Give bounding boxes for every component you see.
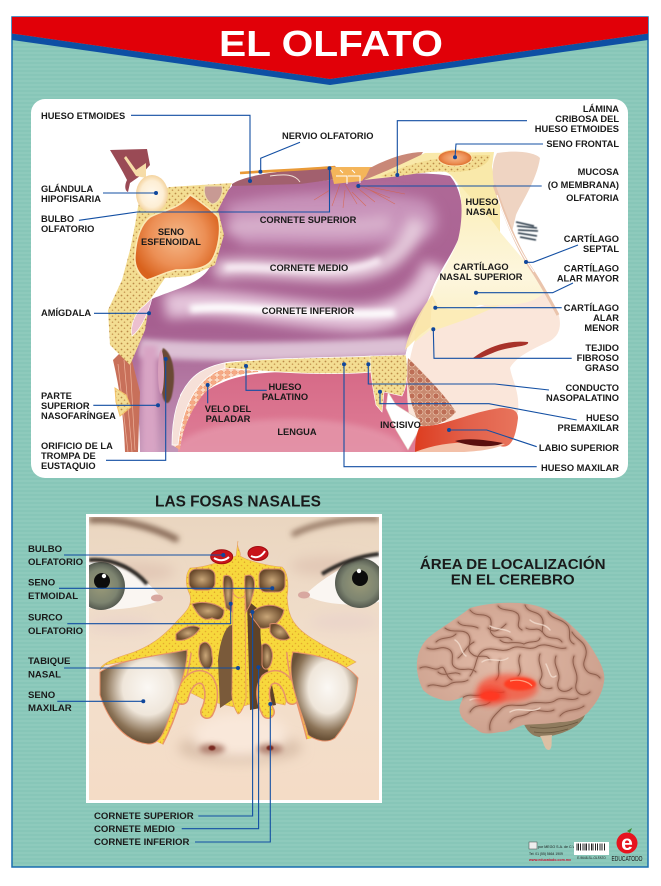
lower nose skin bbox=[407, 285, 560, 425]
label: cartílago alar menor bbox=[433, 303, 619, 333]
label: nervio olfatorio bbox=[258, 131, 373, 174]
label: seno etmoidal: ETMOIDAL bbox=[28, 591, 78, 602]
label: hueso palatino: HUESO bbox=[268, 382, 302, 392]
label: hueso maxilar bbox=[342, 362, 619, 473]
label: seno maxilar: SENO bbox=[28, 690, 56, 701]
pituitary gland bbox=[136, 175, 168, 213]
label: cartílago alar mayor: CARTÍLAGO bbox=[564, 264, 619, 274]
label: cartílago nasal superior: CARTÍLAGO bbox=[453, 262, 509, 272]
brain folds bbox=[420, 605, 600, 730]
label: tejido fibroso graso: TEJIDO bbox=[585, 343, 619, 353]
label: orificio de la trompa de eustaquio bbox=[41, 357, 168, 471]
label: hueso maxilar: HUESO MAXILAR bbox=[541, 463, 619, 473]
label: orificio de la trompa de eustaquio: ORIFICIO DE LA bbox=[41, 441, 113, 451]
maxillary sinus right bbox=[291, 652, 358, 741]
label: tabique nasal: NASAL bbox=[28, 670, 61, 680]
label: nervio olfatorio: NERVIO OLFATORIO bbox=[282, 131, 373, 141]
title: EL OLFATO bbox=[219, 23, 443, 64]
label: mucosa olfatoria: (O MEMBRANA) bbox=[548, 180, 619, 190]
heading: área de localización en el cerebro: ÁREA DE LOCALIZACIÓN bbox=[420, 556, 605, 573]
label: hueso etmoides: HUESO ETMOIDES bbox=[41, 111, 125, 121]
label: surco olfatorio: SURCO bbox=[28, 612, 63, 624]
label: hueso palatino: PALATINO bbox=[262, 392, 308, 402]
nasal bone section bbox=[100, 541, 358, 744]
tongue and lower mouth bbox=[178, 372, 420, 452]
label: cornete inferior bbox=[94, 702, 272, 848]
label: cornete inferior: CORNETE INFERIOR bbox=[262, 306, 355, 316]
pink cell bbox=[204, 186, 222, 204]
label: surco olfatorio: OLFATORIO bbox=[28, 626, 84, 637]
maxillary sinus left bbox=[100, 650, 187, 744]
upper lip bbox=[415, 408, 518, 452]
label: lámina cribosa del hueso etmoides bbox=[395, 104, 619, 177]
nasal cartilage bbox=[415, 178, 545, 342]
label: bulbo olfatorio: BULBO bbox=[41, 214, 74, 224]
heading: área de localización en el cerebro: EN EL CEREBRO bbox=[451, 572, 575, 588]
neck muscle bbox=[113, 345, 140, 452]
septum bbox=[232, 592, 246, 714]
logo: educatodo bbox=[612, 828, 643, 863]
sphenoid bone bbox=[108, 183, 232, 365]
palatine bone bbox=[225, 356, 372, 374]
label: seno frontal bbox=[453, 139, 619, 159]
incisor tooth bbox=[386, 392, 420, 450]
label: seno maxilar: MAXILAR bbox=[28, 703, 72, 714]
label: seno etmoidal bbox=[28, 578, 274, 602]
label: lámina cribosa del hueso etmoides: HUESO ETMOIDES bbox=[535, 124, 619, 134]
label: hueso premaxilar bbox=[378, 390, 619, 433]
premaxillary bone bbox=[370, 355, 407, 412]
heading: las fosas nasales: LAS FOSAS NASALES bbox=[155, 494, 321, 510]
label: bulbo olfatorio bbox=[41, 166, 332, 234]
label: orificio de la trompa de eustaquio: EUSTAQUIO bbox=[41, 461, 96, 471]
label: hueso nasal: NASAL bbox=[466, 207, 498, 217]
barcode: E-9648-SL-OLFATO bbox=[577, 856, 606, 860]
label: bulbo olfatorio: OLFATORIO bbox=[41, 224, 94, 234]
label: cartílago septal bbox=[524, 234, 619, 264]
label: hueso palatino bbox=[244, 364, 308, 402]
panel: face photo with nasal section bbox=[77, 514, 385, 803]
label: bulbo olfatorio: BULBO bbox=[28, 544, 63, 555]
label: cartílago nasal superior: NASAL SUPERIOR bbox=[440, 272, 523, 282]
label: lámina cribosa del hueso etmoides: CRIBOSA DEL bbox=[555, 114, 619, 124]
cribriform plate and olfactory bulb bbox=[330, 167, 373, 184]
label: cartílago alar mayor: ALAR MAYOR bbox=[557, 274, 619, 284]
small bone fragment bbox=[115, 388, 131, 416]
nasal cavity shadow bbox=[218, 625, 232, 708]
label: hueso nasal: HUESO bbox=[465, 197, 499, 207]
label: tejido fibroso graso: GRASO bbox=[585, 363, 619, 373]
label: lámina cribosa del hueso etmoides: LÁMINA bbox=[583, 104, 619, 114]
label: seno frontal: SENO FRONTAL bbox=[546, 139, 619, 149]
label: mucosa olfatoria: OLFATORIA bbox=[566, 193, 619, 203]
label: cartílago alar menor: MENOR bbox=[584, 323, 619, 333]
publisher credits bbox=[528, 842, 576, 862]
illustration: nasal cavity anatomy bbox=[108, 149, 560, 485]
label: tabique nasal bbox=[28, 656, 240, 680]
label: surco olfatorio bbox=[28, 602, 233, 637]
label: seno esfenoidal: ESFENOIDAL bbox=[141, 237, 201, 247]
eyebrows bbox=[89, 519, 379, 540]
label: cartílago alar menor: ALAR bbox=[593, 313, 619, 323]
lower bone hooks bbox=[158, 652, 186, 742]
left eye bbox=[77, 560, 163, 610]
label: cartílago alar mayor bbox=[474, 264, 619, 295]
nasal cavity bbox=[132, 174, 462, 452]
label: glándula hipofisaria bbox=[41, 184, 158, 204]
label: mucosa olfatoria bbox=[356, 167, 619, 203]
publisher credits: por MEGO S.A. de C.V. bbox=[538, 845, 576, 849]
title banner bbox=[12, 17, 648, 85]
publisher credits: Tel: 01 (55) 5664 1909 bbox=[529, 852, 563, 856]
label: velo del paladar: VELO DEL bbox=[205, 404, 252, 414]
label: seno etmoidal: SENO bbox=[28, 578, 56, 588]
publisher credits: www.educatodo.com.mx bbox=[528, 858, 571, 862]
label: conducto nasopalatino: NASOPALATINO bbox=[546, 393, 619, 403]
panel: sagittal section of the nose bbox=[31, 99, 628, 485]
nose dorsum bbox=[494, 185, 558, 315]
label: tejido fibroso graso: FIBROSO bbox=[577, 353, 619, 363]
logo: educatodo: e bbox=[621, 832, 633, 855]
eyelash bbox=[516, 222, 538, 240]
label: bulbo olfatorio bbox=[28, 544, 225, 568]
label: cartílago septal: CARTÍLAGO bbox=[564, 234, 619, 244]
sinus cells bbox=[189, 569, 215, 590]
label: cornete inferior: CORNETE INFERIOR bbox=[94, 837, 189, 848]
highlighted olfactory area bbox=[474, 674, 538, 706]
frontal sinus bbox=[438, 150, 472, 166]
label: glándula hipofisaria: HIPOFISARIA bbox=[41, 194, 101, 204]
label: cartílago septal: SEPTAL bbox=[583, 244, 619, 254]
soft palate bbox=[172, 368, 258, 450]
label: parte superior nasofaríngea: SUPERIOR bbox=[41, 401, 90, 411]
cerebellum bbox=[523, 715, 585, 737]
label: amígdala: AMÍGDALA bbox=[41, 308, 91, 318]
frontal bone bbox=[364, 152, 500, 232]
label: cornete superior: CORNETE SUPERIOR bbox=[260, 215, 357, 225]
olfactory fibres bbox=[314, 184, 405, 208]
label: cornete superior bbox=[94, 610, 254, 822]
olfactory bulbs bbox=[211, 550, 233, 564]
tonsil bbox=[132, 298, 152, 336]
brain stem bbox=[540, 735, 552, 750]
label: orificio de la trompa de eustaquio: TROMPA DE bbox=[41, 451, 96, 461]
label: amígdala bbox=[41, 308, 151, 318]
label: bulbo olfatorio: OLFATORIO bbox=[28, 557, 84, 568]
label: conducto nasopalatino: CONDUCTO bbox=[565, 383, 619, 393]
cerebrum bbox=[417, 603, 604, 734]
pharyngeal opening bbox=[160, 348, 174, 403]
cranial floor membrane bbox=[232, 166, 345, 186]
right eye bbox=[298, 552, 385, 608]
sphenoid sinus bbox=[135, 195, 220, 280]
nostril bbox=[473, 342, 528, 359]
label: mucosa olfatoria: MUCOSA bbox=[578, 167, 619, 177]
label: labio superior bbox=[447, 428, 619, 453]
nose tip and nostrils bbox=[178, 713, 302, 762]
label: cornete medio: CORNETE MEDIO bbox=[94, 824, 176, 835]
label: hueso etmoides bbox=[41, 111, 252, 183]
illustration: brain bbox=[417, 603, 604, 750]
label: cartílago alar menor: CARTÍLAGO bbox=[564, 303, 619, 313]
label: velo del paladar bbox=[205, 383, 252, 424]
label: tabique nasal: TABIQUE bbox=[28, 656, 71, 667]
label: incisivo: INCISIVO bbox=[380, 420, 421, 430]
label: tejido fibroso graso bbox=[431, 327, 619, 373]
logo: educatodo: EDUCATODO bbox=[612, 856, 643, 863]
label: velo del paladar: PALADAR bbox=[206, 414, 251, 424]
label: labio superior: LABIO SUPERIOR bbox=[539, 443, 619, 453]
label: parte superior nasofaríngea bbox=[41, 391, 160, 421]
barcode bbox=[574, 842, 609, 860]
label: parte superior nasofaríngea: NASOFARÍNGEA bbox=[41, 411, 116, 421]
label: hueso premaxilar: PREMAXILAR bbox=[558, 423, 619, 433]
label: hueso premaxilar: HUESO bbox=[586, 413, 619, 423]
label: cornete medio: CORNETE MEDIO bbox=[270, 263, 348, 273]
label: conducto nasopalatino bbox=[366, 362, 619, 403]
label: lengua: LENGUA bbox=[277, 427, 317, 437]
label: seno esfenoidal: SENO bbox=[158, 227, 184, 237]
label: cornete superior: CORNETE SUPERIOR bbox=[94, 811, 194, 822]
lip muscle bbox=[407, 358, 456, 426]
label: cornete medio bbox=[94, 665, 260, 835]
label: seno maxilar bbox=[28, 690, 145, 714]
eye sockets bbox=[124, 556, 348, 582]
forehead skin bbox=[493, 152, 540, 232]
label: parte superior nasofaríngea: PARTE bbox=[41, 391, 72, 401]
label: glándula hipofisaria: GLÁNDULA bbox=[41, 184, 93, 194]
skull base top left bbox=[110, 149, 150, 192]
